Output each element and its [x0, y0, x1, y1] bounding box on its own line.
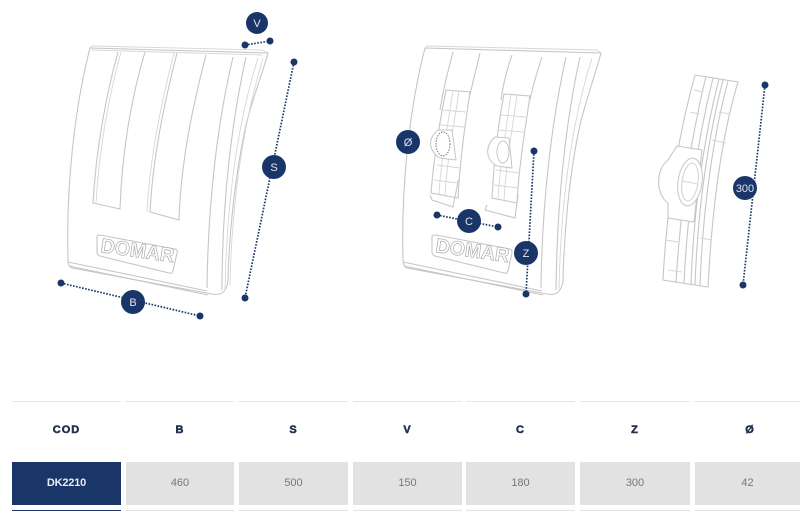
- code cell DK2210: [12, 462, 121, 505]
- value C: [466, 462, 575, 505]
- bracket right: [488, 94, 530, 203]
- value Z: [580, 462, 690, 505]
- bracket side view: [659, 75, 738, 287]
- dimension Z: Z: [523, 248, 530, 260]
- dimension C: [434, 209, 502, 233]
- diagram: product drawings with dimension markers: [58, 12, 768, 320]
- table of dimensions: [12, 401, 800, 511]
- dimension S: S: [270, 162, 278, 174]
- bracket left: [431, 90, 470, 198]
- mudflap front view: [68, 46, 268, 295]
- logo text: DOMAR: [99, 235, 176, 267]
- value C: 180: [511, 477, 530, 489]
- dimension V: [242, 12, 274, 48]
- value B: [126, 462, 234, 505]
- value V: [353, 462, 462, 505]
- dimension diameter: Ø: [404, 137, 413, 149]
- dimension C: C: [465, 216, 473, 228]
- value B: 460: [171, 477, 189, 489]
- dimension 300: 300: [736, 183, 754, 195]
- header: diameter: Ø: [745, 424, 755, 436]
- value S: 500: [284, 477, 303, 489]
- value diameter: [695, 462, 800, 505]
- value S: [239, 462, 348, 505]
- dimension V: V: [253, 18, 261, 30]
- dimension Z: [514, 148, 538, 298]
- dimension diameter: [396, 130, 420, 154]
- dimension 300: [733, 82, 768, 288]
- header: V: V: [403, 424, 412, 436]
- value diameter: 42: [741, 477, 754, 489]
- dimension S: [242, 58, 298, 302]
- value V: 150: [398, 477, 417, 489]
- mudflap rear view with brackets: [403, 46, 601, 295]
- value Z: 300: [626, 477, 644, 489]
- header: B: B: [176, 424, 184, 436]
- header: C: C: [516, 424, 525, 436]
- dimension B: [58, 280, 204, 320]
- code cell DK2210: DK2210: [47, 477, 86, 489]
- logo text: DOMAR: [434, 235, 511, 267]
- header: S: S: [289, 424, 298, 436]
- header: Z: Z: [631, 424, 639, 436]
- dimension B: B: [129, 297, 137, 309]
- header: COD: COD: [53, 424, 80, 436]
